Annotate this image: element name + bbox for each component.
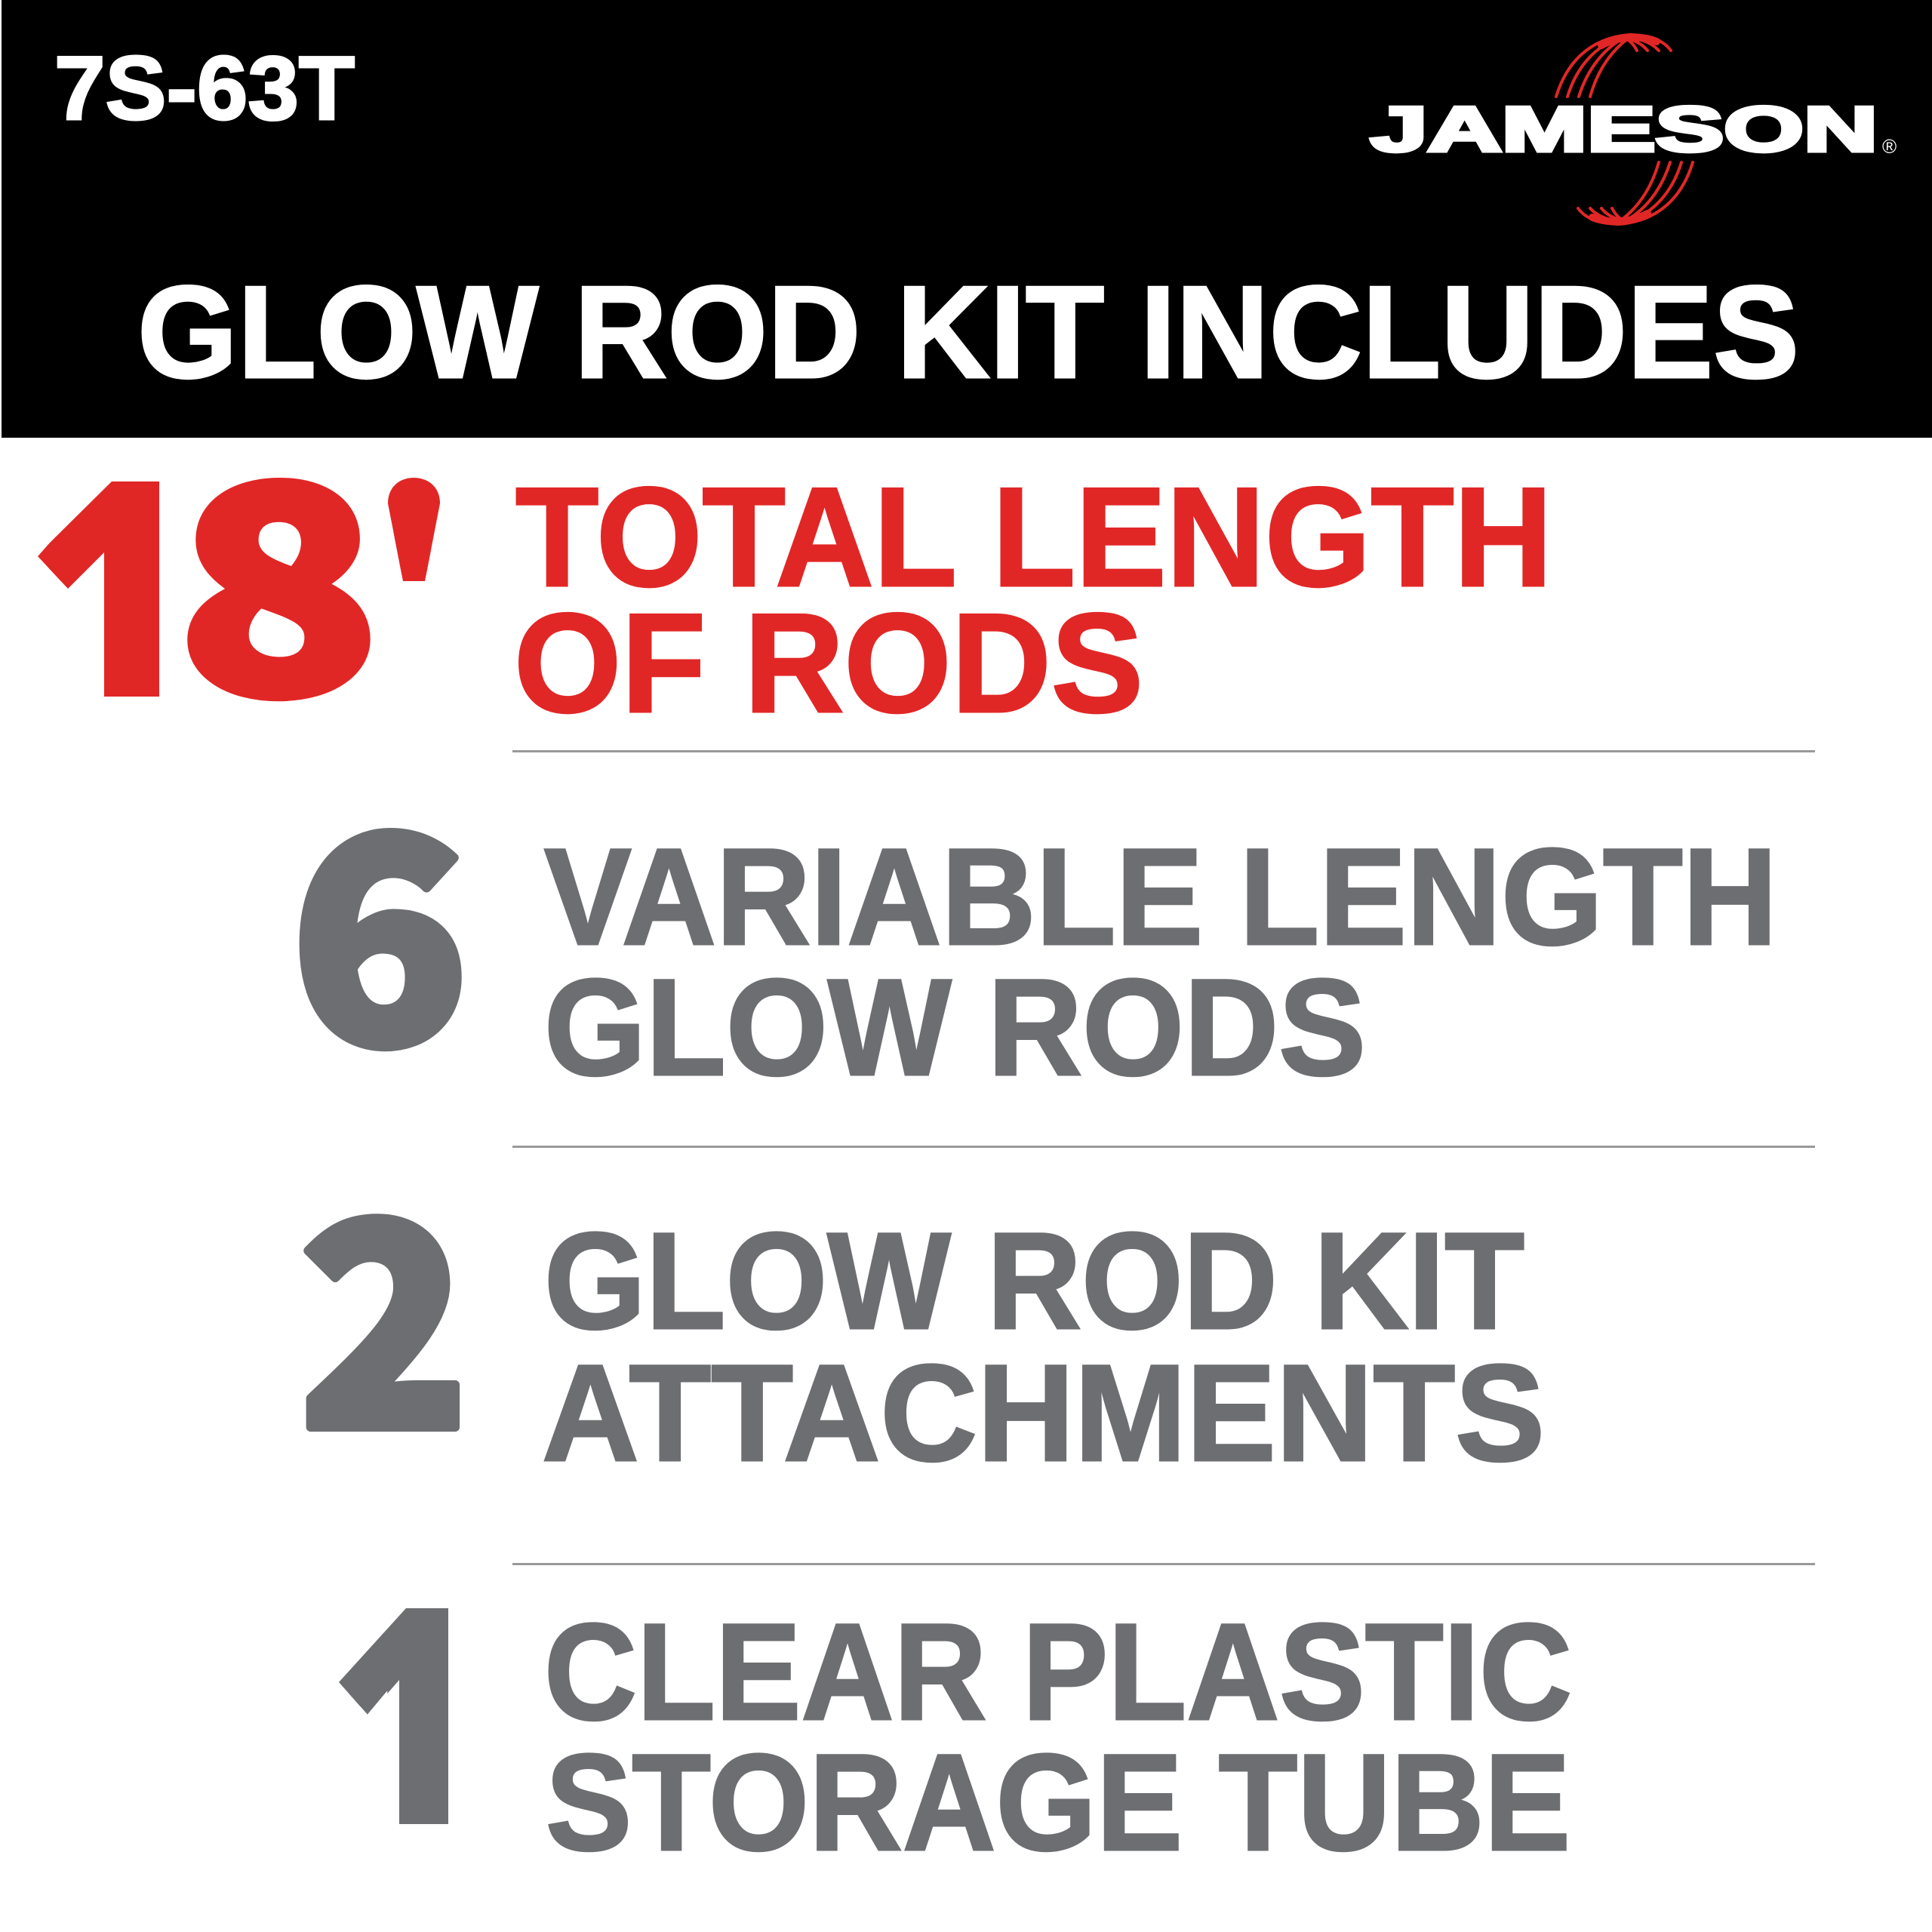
model number: 7S-63T — [54, 38, 355, 139]
big number 18 feet — [24, 363, 451, 841]
icon: Jameson logo — [1371, 35, 1897, 224]
big number 6: 6 — [291, 713, 469, 1125]
text: variable length glow rods — [544, 820, 1777, 1104]
text: clear plastic storage tube: STORAGE TUBE — [546, 1725, 1571, 1879]
text: variable length glow rods: GLOW RODS — [544, 950, 1366, 1104]
logo: red arcs — [1556, 35, 1693, 224]
text: clear plastic storage tube: CLEAR PLASTIC — [544, 1595, 1572, 1749]
text: total length of rods: TOTAL LENGTH — [515, 458, 1552, 616]
big number 18 feet: ' — [375, 410, 451, 806]
text: total length of rods — [514, 458, 1552, 742]
text: total length of rods: OF RODS — [514, 584, 1143, 742]
text: variable length glow rods: VARIABLE LENGTH — [544, 820, 1777, 974]
row: 1 storage tube — [339, 1608, 1570, 1852]
heading: GLOW ROD KIT INCLUDES — [137, 258, 1799, 405]
big number 2: 2 — [299, 1100, 469, 1509]
text: clear plastic storage tube — [544, 1595, 1572, 1879]
logo: wordmark: JAMESON — [1371, 94, 1878, 165]
text: glow rod kit attachments: GLOW ROD KIT — [544, 1204, 1524, 1358]
big number 18 feet: 1 — [24, 366, 217, 841]
row: 2 attachments — [299, 1100, 1545, 1509]
logo: registered mark: ® — [1882, 135, 1897, 158]
big number 18 feet: 8 — [177, 363, 380, 775]
text: glow rod kit attachments: ATTACHMENTS — [542, 1336, 1545, 1490]
panel: black header — [2, 0, 1932, 438]
row: 6 glow rods — [291, 713, 1777, 1125]
row: 18 feet total length — [24, 363, 1552, 841]
text: glow rod kit attachments — [542, 1204, 1545, 1490]
